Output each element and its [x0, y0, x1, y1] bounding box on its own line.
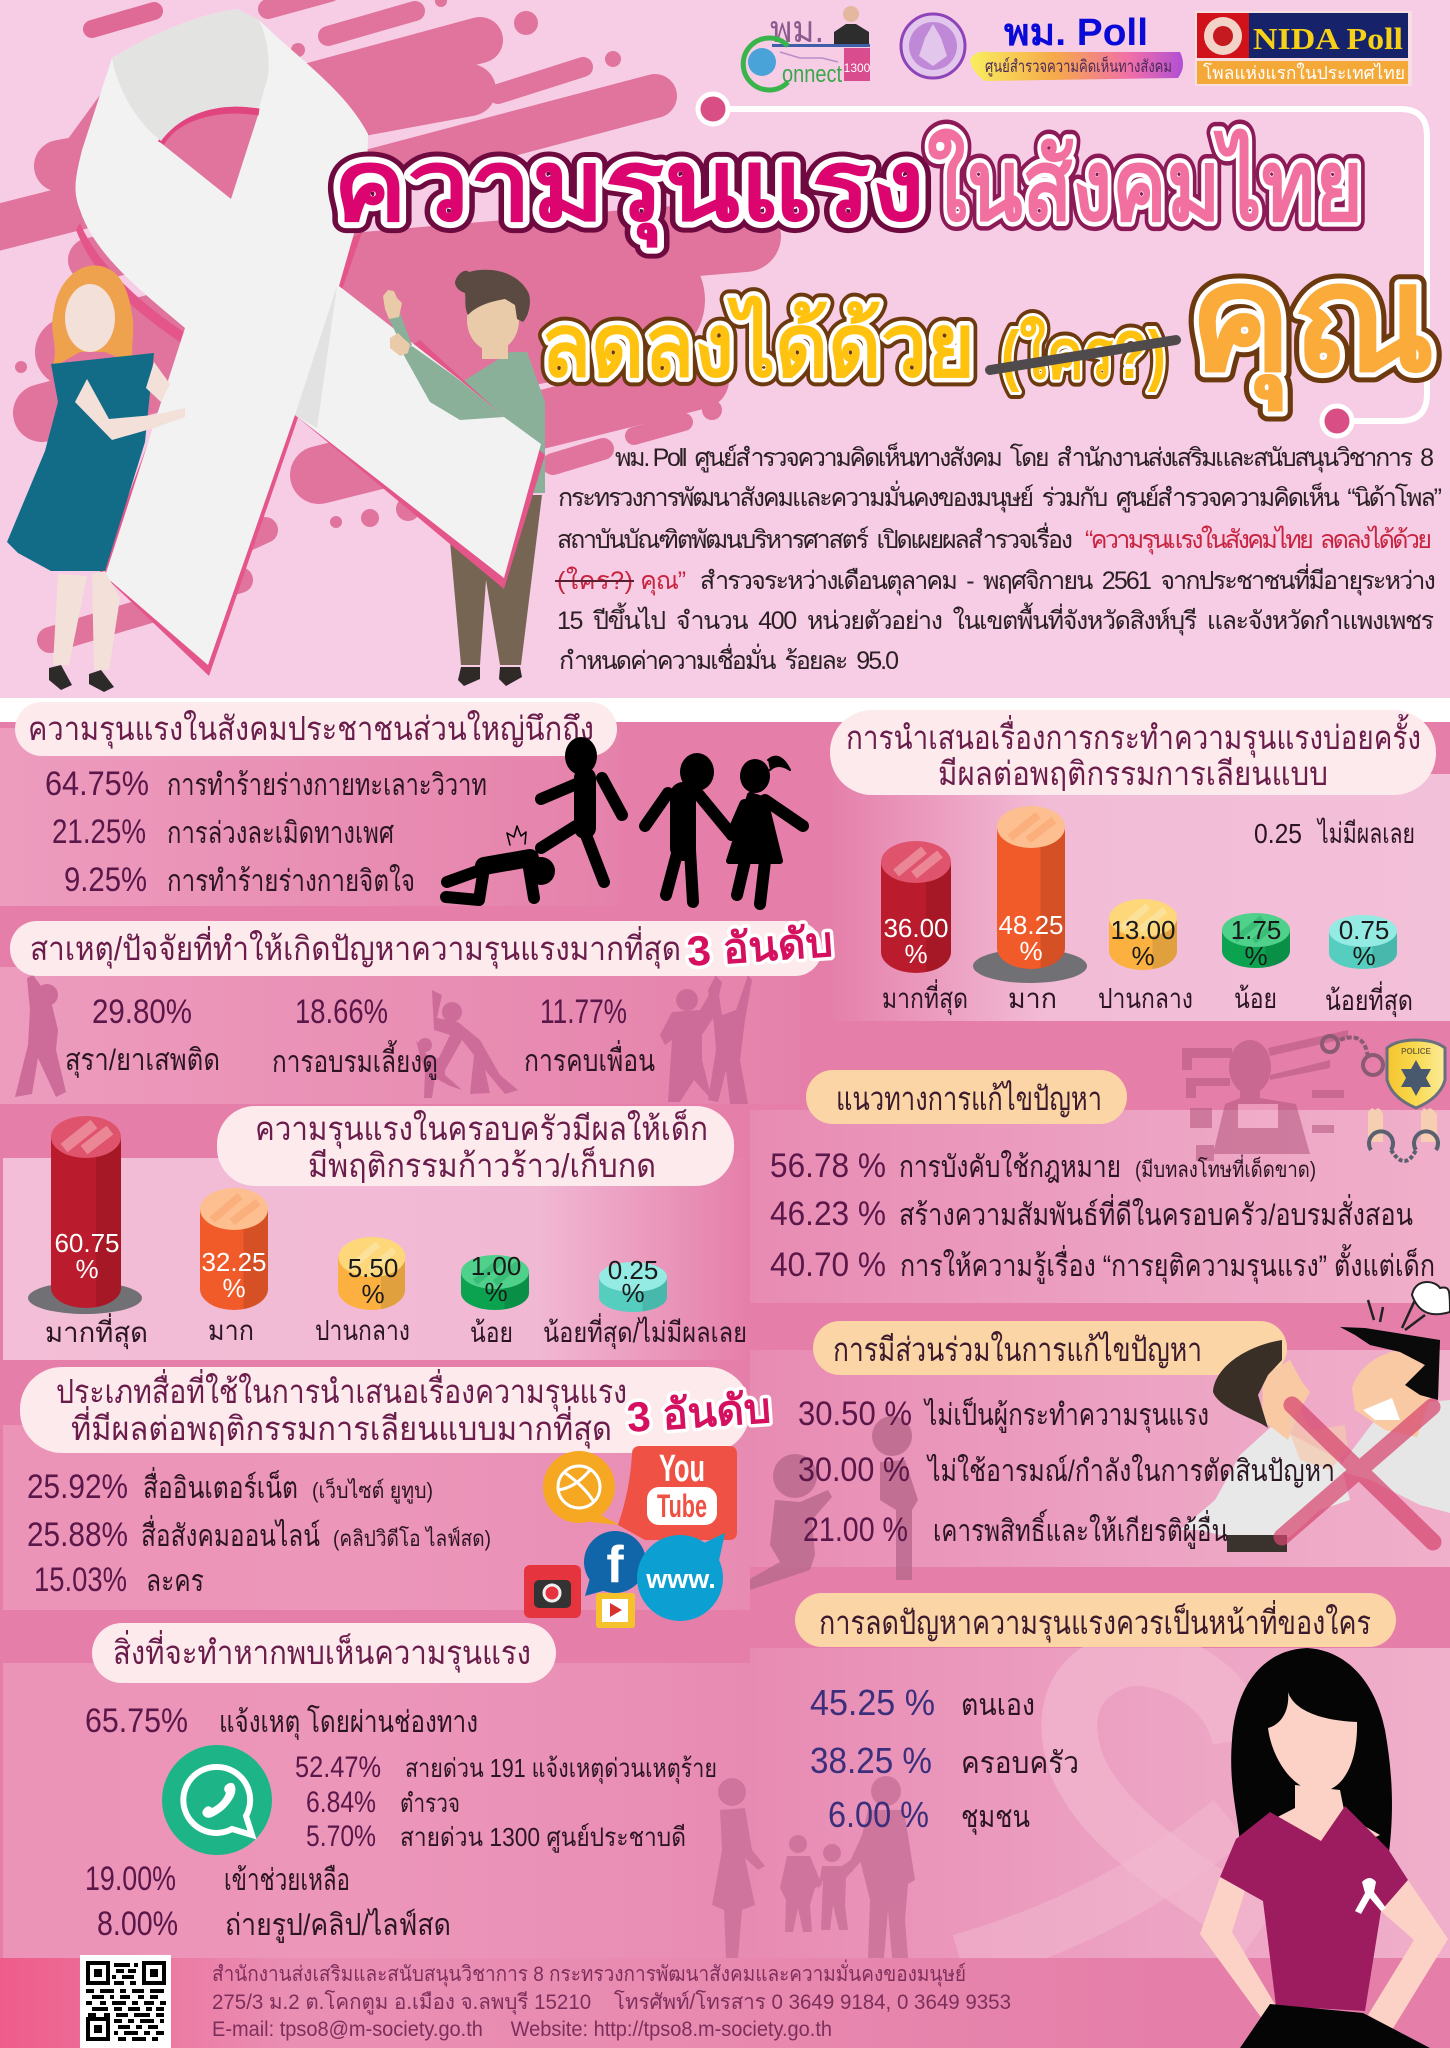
cause 3 — [524, 993, 655, 1078]
bar: moderate 5.50: % — [361, 1279, 385, 1309]
panel: media types — [3, 1367, 772, 1628]
heading pill: 3 อันดับ — [685, 918, 834, 975]
bar: much 32.25 — [200, 1188, 268, 1310]
logo: social development poll: ศูนย์สำรวจความคิดเห็นทางสังคม — [985, 55, 1172, 77]
title line 2: คุณ — [1189, 234, 1435, 412]
bar: little 1.00 — [461, 1251, 529, 1310]
heading pill — [217, 1106, 734, 1186]
bar: moderate 5.50: 5.50 — [348, 1253, 398, 1283]
icon: Facebook bubble: f — [606, 1536, 624, 1594]
illustration: man holding ribbon (body) — [449, 352, 545, 686]
bar: least 0.25: % — [621, 1278, 645, 1308]
intro paragraph: สำรวจระหว่างเดือนตุลาคม - พฤศจิกายน 2561 จากประชาชนที่มีอายุระหว่าง — [700, 563, 1436, 596]
bar: moderate 13.00: % — [1131, 941, 1155, 971]
icon: family silhouette — [712, 1776, 915, 1958]
list of participation: ไม่เป็นผู้กระทำความรุนแรง — [923, 1396, 1209, 1434]
heading pill: สาเหตุ/ปัจจัยที่ทำให้เกิดปัญหาความรุนแรงมากที่สุด — [30, 926, 681, 969]
list of actions: แจ้งเหตุ โดยผ่านช่องทาง — [219, 1704, 478, 1741]
bar: least 0.75 — [1329, 915, 1397, 971]
heading pill — [795, 1593, 1396, 1647]
list of results: การล่วงละเมิดทางเพศ — [167, 817, 394, 850]
contact details: E-mail: tpso8@m-society.go.th Website: http://tpso8.m-society.go.th — [212, 2018, 832, 2041]
bar: little 1.00: 1.00 — [471, 1251, 521, 1281]
icon: phone chat bubble — [162, 1745, 272, 1855]
QR code — [80, 1955, 171, 2048]
list of participation: เคารพสิทธิ์และให้เกียรติผู้อื่น — [933, 1509, 1228, 1549]
category labels — [882, 979, 1413, 1018]
panel: family violence affects children — [3, 1106, 747, 1360]
contact details: 275/3 ม.2 ต.โคกตูม อ.เมือง จ.ลพบุรี 15210 โทรศัพท์/โทรสาร 0 3649 9184, 0 3649 9353 — [212, 1990, 1011, 2015]
cause 3: 11.77% — [540, 993, 627, 1031]
list of results: 9.25% — [64, 861, 147, 899]
bar: much 32.25: % — [222, 1273, 246, 1303]
bar: moderate 5.50 — [338, 1237, 406, 1310]
title line 1: ความรุนแรง — [333, 130, 925, 248]
icon: parent hitting child silhouette — [416, 990, 518, 1098]
list of responsibility — [810, 1682, 1079, 1836]
intro paragraph: 15 ปีขึ้นไป จำนวน 400 หน่วยตัวอย่าง ในเขตพื้นที่จังหวัดสิงห์บุรี และจังหวัดกำแพงเพชร — [557, 602, 1434, 636]
list of actions: 5.70% — [306, 1820, 376, 1853]
logo: NIDA Poll — [1195, 11, 1412, 86]
panel: solutions — [750, 1030, 1450, 1303]
category labels: น้อย — [470, 1317, 513, 1348]
heading pill — [806, 1070, 1127, 1124]
bar: least 0.25: 0.25 — [608, 1255, 658, 1285]
lower background — [0, 722, 1450, 2048]
icon: basketball bubble — [543, 1451, 620, 1525]
list of results: 64.75% — [45, 765, 149, 803]
bar: most 60.75: % — [75, 1254, 99, 1284]
bar: much 48.25: 48.25 — [998, 910, 1064, 940]
icon: YouTube bubble: You — [659, 1448, 705, 1490]
bar: most 36.00: % — [904, 939, 928, 969]
list of media: (คลิปวิดีโอ ไลฟ์สด) — [333, 1526, 491, 1551]
category labels: ปานกลาง — [315, 1315, 410, 1346]
list of solutions: 40.70 % — [770, 1246, 886, 1284]
icon: prisoner mugshot — [1182, 1030, 1348, 1161]
intro paragraph: “ความรุนแรงในสังคมไทย ลดลงได้ด้วย — [1085, 525, 1432, 555]
category labels: มากที่สุด — [45, 1313, 148, 1350]
icon: fighting men illustration — [1180, 1282, 1450, 1552]
panel: frequent presentation affects imitation — [830, 710, 1450, 1021]
cause 3: การคบเพื่อน — [524, 1040, 655, 1078]
illustration: man arm and head — [383, 270, 530, 420]
icon: handcuffs top — [1322, 1036, 1383, 1075]
category labels: น้อยที่สุด — [1325, 981, 1413, 1018]
list of responsibility: ครอบครัว — [961, 1747, 1079, 1780]
list of media: 25.88% — [27, 1516, 128, 1554]
list of responsibility: 45.25 % — [810, 1682, 935, 1723]
intro paragraph: คุณ” — [640, 567, 686, 596]
list of participation: 21.00 % — [803, 1511, 908, 1549]
list of media: สื่ออินเตอร์เน็ต — [143, 1467, 298, 1505]
list of actions: 65.75% — [85, 1702, 188, 1740]
icon: small white ribbon — [1355, 1878, 1386, 1914]
list of actions: ตำรวจ — [400, 1788, 460, 1818]
heading pill — [813, 1321, 1287, 1375]
title line 1: ในสังคมไทย — [927, 128, 1363, 242]
list of responsibility: 38.25 % — [810, 1740, 932, 1781]
list of responsibility: ตนเอง — [961, 1689, 1035, 1722]
title line 2: ลดลงได้ด้วย — [541, 296, 975, 395]
logo: social development connect: พม. — [770, 9, 824, 51]
heading pill: มีพฤติกรรมก้าวร้าว/เก็บกด — [308, 1146, 656, 1184]
title line 1: ความรุนแรง — [333, 130, 925, 248]
list of results: การทำร้ายร่างกายทะเลาะวิวาท — [167, 769, 487, 802]
bar: little 1.75 — [1222, 913, 1290, 971]
list of participation: 30.00 % — [798, 1451, 910, 1489]
heading pill — [10, 918, 834, 976]
intro paragraph: กำหนดค่าความเชื่อมั่น ร้อยละ 95.0 — [559, 643, 899, 675]
title line 1: ความรุนแรง — [333, 130, 925, 248]
cylinder chart — [881, 806, 1413, 1018]
list of media: สื่อสังคมออนไลน์ — [141, 1515, 320, 1553]
logo: NIDA Poll: โพลแห่งแรกในประเทศไทย — [1203, 62, 1405, 83]
list of actions: เข้าช่วยเหลือ — [224, 1864, 350, 1897]
list of actions — [85, 1702, 717, 1943]
category labels — [45, 1313, 747, 1350]
list of participation: 30.50 % — [798, 1395, 912, 1433]
cause 1: สุรา/ยาเสพติด — [65, 1044, 220, 1079]
cause 2: การอบรมเลี้ยงดู — [272, 1040, 438, 1080]
category labels: มาก — [208, 1315, 254, 1346]
contact details: สำนักงานส่งเสริมและสนับสนุนวิชาการ 8 กระทรวงการพัฒนาสังคมและความมั่นคงของมนุษย์ — [212, 1959, 966, 1987]
bar: most 36.00: 36.00 — [883, 913, 949, 943]
cause 2 — [272, 993, 438, 1080]
illustration: woman with pink ribbon shirt — [1200, 1648, 1448, 2048]
title line 2: ลดลงได้ด้วย — [541, 296, 975, 395]
intro paragraph: พม. Poll ศูนย์สำรวจความคิดเห็นทางสังคม โดย สำนักงานส่งเสริมและสนับสนุนวิชาการ 8 — [615, 442, 1434, 473]
panel: whose duty — [750, 1593, 1450, 1960]
bar: little 1.75: 1.75 — [1231, 915, 1281, 945]
bar: most 36.00 — [881, 841, 951, 973]
icon: cuffed hands — [1368, 1108, 1438, 1161]
panel: top 3 causes of violence — [0, 918, 834, 1104]
list of actions: 6.84% — [306, 1786, 376, 1819]
heading pill — [15, 702, 617, 756]
list of solutions: 46.23 % — [770, 1195, 886, 1233]
illustration: white awareness ribbon — [76, 9, 545, 676]
cause 1 — [65, 993, 220, 1079]
bar: moderate 13.00 — [1109, 899, 1177, 971]
logo: social development poll — [970, 12, 1183, 81]
logo: social development connect — [743, 6, 871, 90]
illustration: woman — [7, 265, 185, 692]
icon: video player — [596, 1593, 635, 1628]
decorative ribbon background bars — [0, 0, 745, 640]
heading pill: ความรุนแรงในสังคมประชาชนส่วนใหญ่นึกถึง — [28, 710, 594, 749]
list of solutions: การบังคับใช้กฎหมาย — [899, 1150, 1121, 1184]
list of participation: ไม่ใช้อารมณ์/กำลังในการตัดสินปัญหา — [926, 1453, 1335, 1488]
list of solutions — [770, 1147, 1435, 1285]
icon: quarrelling friends silhouette — [660, 975, 752, 1104]
icon: Facebook bubble — [584, 1531, 646, 1596]
cause 1: 29.80% — [92, 993, 192, 1031]
category labels: ปานกลาง — [1098, 983, 1193, 1014]
list of solutions: (มีบทลงโทษที่เด็ดขาด) — [1135, 1154, 1316, 1182]
heading pill: การมีส่วนร่วมในการแก้ไขปัญหา — [833, 1331, 1202, 1368]
panel: violence most people think of — [0, 702, 803, 906]
logo: NIDA Poll: NIDA Poll — [1253, 21, 1403, 56]
list of actions: 19.00% — [85, 1860, 176, 1898]
title line 2: ลดลงได้ด้วย — [541, 296, 975, 395]
category labels: น้อย — [1234, 983, 1277, 1014]
bar: little 1.75: % — [1244, 941, 1268, 971]
heading pill: สิ่งที่จะทำหากพบเห็นความรุนแรง — [113, 1630, 531, 1673]
list of media: ละคร — [146, 1565, 204, 1598]
heading pill — [830, 710, 1436, 795]
icon: YouTube bubble: Tube — [657, 1488, 707, 1524]
list of actions: สายด่วน 191 แจ้งเหตุด่วนเหตุร้าย — [405, 1753, 717, 1784]
heading pill: แนวทางการแก้ไขปัญหา — [836, 1080, 1102, 1117]
heading pill: ที่มีผลต่อพฤติกรรมการเลียนแบบมากที่สุด — [71, 1406, 612, 1449]
title line 2: (ใคร?) — [1001, 315, 1166, 393]
list of media: 15.03% — [34, 1561, 127, 1599]
intro paragraph: (ใคร?) — [557, 566, 633, 595]
list of results — [45, 765, 487, 899]
bar: least 0.25 — [599, 1255, 667, 1312]
title line 2: (ใคร?) — [1001, 315, 1166, 393]
category labels: มากที่สุด — [882, 979, 968, 1016]
title line 2: คุณ — [1189, 234, 1435, 412]
list of media — [27, 1467, 491, 1599]
logo: social development connect: onnect — [782, 61, 842, 88]
list of solutions: 56.78 % — [770, 1147, 886, 1185]
icon: pale awareness ribbon backdrop — [960, 1658, 1260, 1960]
list of actions: 8.00% — [97, 1905, 178, 1943]
list of actions: สายด่วน 1300 ศูนย์ประชาบดี — [400, 1822, 686, 1853]
title line 1 — [333, 128, 1363, 248]
title line 2: คุณ — [1189, 234, 1435, 412]
heading pill: ประเภทสื่อที่ใช้ในการนำเสนอเรื่องความรุนแรง — [56, 1369, 627, 1412]
list of actions: 52.47% — [295, 1751, 381, 1784]
category labels: น้อยที่สุด/ไม่มีผลเลย — [543, 1313, 747, 1350]
contact details — [212, 1959, 1011, 2041]
list of results: 21.25% — [52, 813, 146, 851]
intro paragraph: กระทรวงการพัฒนาสังคมและความมั่นคงของมนุษย์ ร่วมกับ ศูนย์สำรวจความคิดเห็น “นิด้าโพล” — [558, 480, 1442, 513]
logo: social development connect: 1300 — [844, 61, 871, 75]
heading pill: 3 อันดับ — [625, 1384, 772, 1441]
note: no effect: 0.25 — [1254, 818, 1302, 849]
list of responsibility: 6.00 % — [828, 1794, 929, 1835]
icon: kneeling and standing silhouette — [748, 1416, 918, 1590]
intro paragraph — [555, 442, 1442, 675]
list of media: 25.92% — [27, 1468, 128, 1506]
icon: police badge — [1387, 1040, 1445, 1108]
header background — [0, 0, 1450, 698]
heading pill — [92, 1623, 556, 1683]
list of actions: ถ่ายรูป/คลิป/ไลฟ์สด — [225, 1907, 451, 1943]
icon: camera — [524, 1565, 581, 1618]
list of participation — [798, 1395, 1335, 1549]
icon: police badge: POLICE — [1401, 1047, 1432, 1056]
bar: much 32.25: 32.25 — [201, 1247, 267, 1277]
list of responsibility: ชุมชน — [961, 1801, 1030, 1836]
note: no effect — [1254, 818, 1415, 849]
list of results: การทำร้ายร่างกายจิตใจ — [167, 864, 415, 898]
title line 1: ในสังคมไทย — [927, 128, 1363, 242]
panel: taking part in solving — [748, 1282, 1450, 1590]
cylinder chart — [28, 1116, 747, 1350]
category labels: มาก — [1008, 983, 1057, 1014]
panel: what to do on witnessing violence — [3, 1623, 750, 1958]
title frame line — [698, 94, 1427, 436]
icon: drinking man silhouette — [15, 975, 66, 1097]
bar: most 60.75 — [28, 1116, 142, 1314]
icon: YouTube bubble — [618, 1446, 737, 1540]
icon: www bubble: www. — [645, 1564, 716, 1594]
bar: moderate 13.00: 13.00 — [1110, 915, 1176, 945]
intro paragraph: สถาบันบัณฑิตพัฒนบริหารศาสตร์ เปิดเผยผลสำรวจเรื่อง — [557, 522, 1073, 554]
bar: much 48.25: % — [1019, 936, 1043, 966]
bar: least 0.75: % — [1352, 941, 1376, 971]
icon: black silhouettes of violence — [446, 737, 803, 904]
title line 1: ในสังคมไทย — [927, 128, 1363, 242]
title line 2 — [541, 234, 1435, 412]
bar: least 0.75: 0.75 — [1339, 915, 1389, 945]
note: no effect: ไม่มีผลเลย — [1316, 818, 1415, 849]
logo: ministry seal — [901, 14, 965, 78]
logo: social development poll: พม. Poll — [1004, 12, 1148, 54]
icon: social media cluster — [524, 1446, 737, 1628]
cause 2: 18.66% — [295, 993, 388, 1031]
footer bar — [0, 1955, 1160, 2048]
heading pill: มีผลต่อพฤติกรรมการเลียนแบบ — [938, 755, 1328, 792]
heading pill — [20, 1367, 772, 1453]
heading pill: ความรุนแรงในครอบครัวมีผลให้เด็ก — [255, 1109, 708, 1149]
bar: much 48.25 — [973, 806, 1087, 983]
bar: little 1.00: % — [484, 1277, 508, 1307]
list of media: (เว็บไซต์ ยูทูบ) — [312, 1476, 433, 1504]
bar: most 60.75: 60.75 — [54, 1228, 120, 1258]
icon: www bubble — [637, 1533, 725, 1621]
